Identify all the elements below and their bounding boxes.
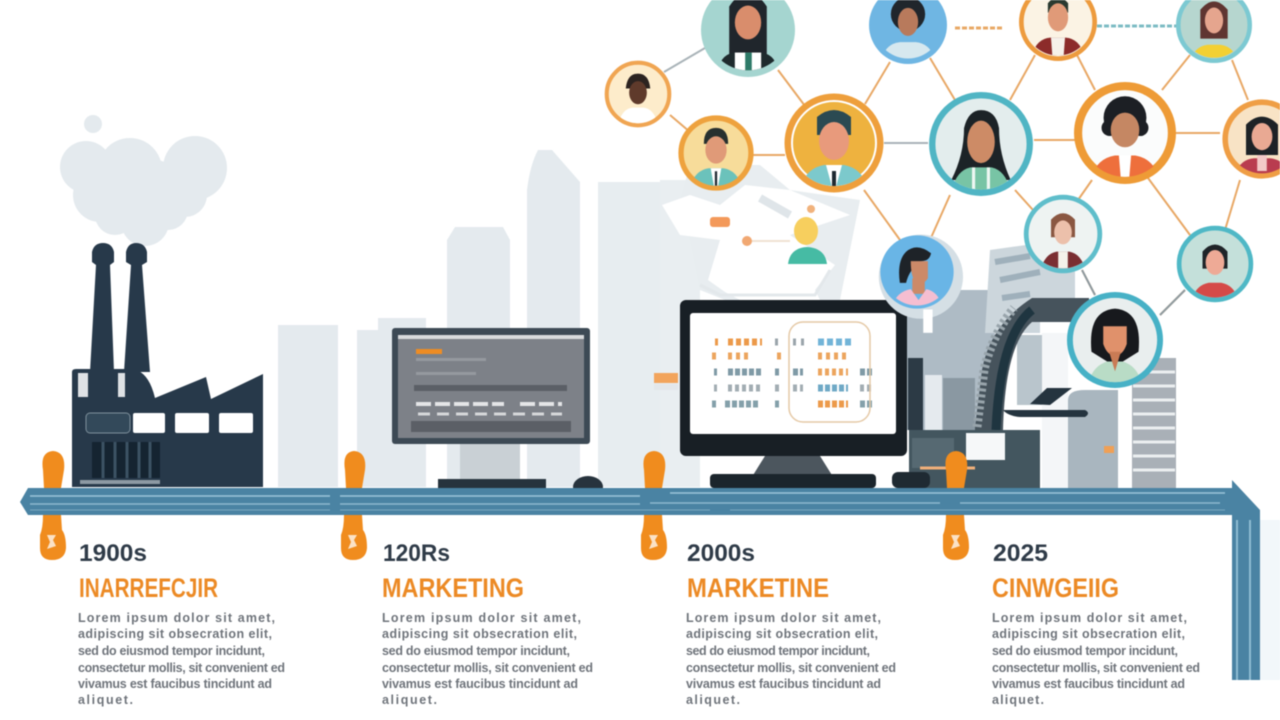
avatar: orange ring left bbox=[681, 118, 751, 199]
avatar: small orange left bbox=[607, 63, 669, 135]
column two: 120Rs bbox=[382, 540, 593, 707]
body text: Lorem ipsum dolor sit amet, bbox=[382, 611, 581, 625]
year 2025: 2025 bbox=[993, 540, 1048, 567]
body text bbox=[686, 611, 896, 707]
avatar: teal ring bottom bbox=[1070, 295, 1160, 399]
body text: sed do eiusmod tempor incidunt, bbox=[992, 644, 1178, 658]
body text: aliquet. bbox=[992, 693, 1044, 707]
heading: INARREFCJIR bbox=[79, 573, 218, 603]
timeline marker pins bbox=[40, 451, 969, 560]
column three: 2000s bbox=[686, 540, 896, 707]
body text bbox=[382, 611, 593, 707]
avatar: orange ring top bbox=[1021, 0, 1095, 69]
heading: CINWGEIIG bbox=[992, 573, 1119, 603]
body text: consectetur mollis, sit convenient ed bbox=[382, 661, 593, 675]
machine and tower cluster bbox=[892, 243, 1176, 488]
small orange tag bbox=[654, 373, 678, 390]
avatar: teal ring maroon bbox=[1026, 197, 1100, 282]
avatar: teal ring top right bbox=[1178, 0, 1250, 71]
avatar: large gold bbox=[788, 97, 880, 203]
body text: adipiscing sit obsecration elit, bbox=[382, 627, 577, 641]
body text bbox=[78, 611, 285, 707]
body text: Lorem ipsum dolor sit amet, bbox=[78, 611, 275, 625]
body text: aliquet. bbox=[686, 693, 740, 707]
body text: adipiscing sit obsecration elit, bbox=[78, 627, 272, 641]
body text: Lorem ipsum dolor sit amet, bbox=[686, 611, 881, 625]
avatar: teal ring red shirt bbox=[1179, 228, 1251, 311]
heading: MARKETING bbox=[382, 573, 524, 603]
timeline arrow bar bbox=[20, 480, 1280, 680]
body text: vivamus est faucibus tincidunt ad bbox=[992, 677, 1185, 691]
central sketch cluster with bulb bbox=[662, 165, 860, 302]
body text: vivamus est faucibus tincidunt ad bbox=[686, 677, 881, 691]
body text: vivamus est faucibus tincidunt ad bbox=[382, 677, 578, 691]
mouse bbox=[573, 476, 603, 498]
column one: 1900s bbox=[78, 540, 285, 707]
light bulb bbox=[794, 217, 818, 245]
body text: sed do eiusmod tempor incidunt, bbox=[382, 644, 570, 658]
year 1900s: 1900s bbox=[79, 540, 147, 567]
body text: sed do eiusmod tempor incidunt, bbox=[686, 644, 870, 658]
avatar: large teal centre bbox=[932, 95, 1030, 208]
heading: MARKETINE bbox=[687, 573, 829, 603]
city skyline background bbox=[278, 150, 700, 487]
body text: vivamus est faucibus tincidunt ad bbox=[78, 677, 272, 691]
screen data grid bbox=[712, 342, 874, 404]
body text: consectetur mollis, sit convenient ed bbox=[78, 661, 285, 675]
body text: aliquet. bbox=[382, 693, 437, 707]
body text: adipiscing sit obsecration elit, bbox=[992, 627, 1185, 641]
body text: Lorem ipsum dolor sit amet, bbox=[992, 611, 1187, 625]
factory chimneys bbox=[90, 243, 150, 372]
smoke cloud bbox=[60, 115, 227, 246]
avatar: blue top bbox=[869, 0, 947, 72]
body text: sed do eiusmod tempor incidunt, bbox=[78, 644, 265, 658]
year 2000s: 2000s bbox=[687, 540, 755, 567]
avatar: teal top left bbox=[701, 0, 795, 86]
network connectors bbox=[664, 26, 1248, 315]
body text: consectetur mollis, sit convenient ed bbox=[992, 661, 1200, 675]
body text: consectetur mollis, sit convenient ed bbox=[686, 661, 896, 675]
body text bbox=[992, 611, 1200, 707]
factory bbox=[72, 243, 263, 487]
body text: adipiscing sit obsecration elit, bbox=[686, 627, 878, 641]
monitor one bbox=[392, 328, 590, 488]
avatar: blue lower bbox=[879, 235, 963, 333]
avatar: large orange right bbox=[1078, 86, 1172, 194]
column four: 2025 bbox=[992, 540, 1200, 707]
body text: aliquet. bbox=[78, 693, 133, 707]
avatar: orange far right bbox=[1225, 102, 1280, 187]
monitor two bbox=[680, 300, 907, 488]
year 120Rs: 120Rs bbox=[383, 540, 450, 567]
